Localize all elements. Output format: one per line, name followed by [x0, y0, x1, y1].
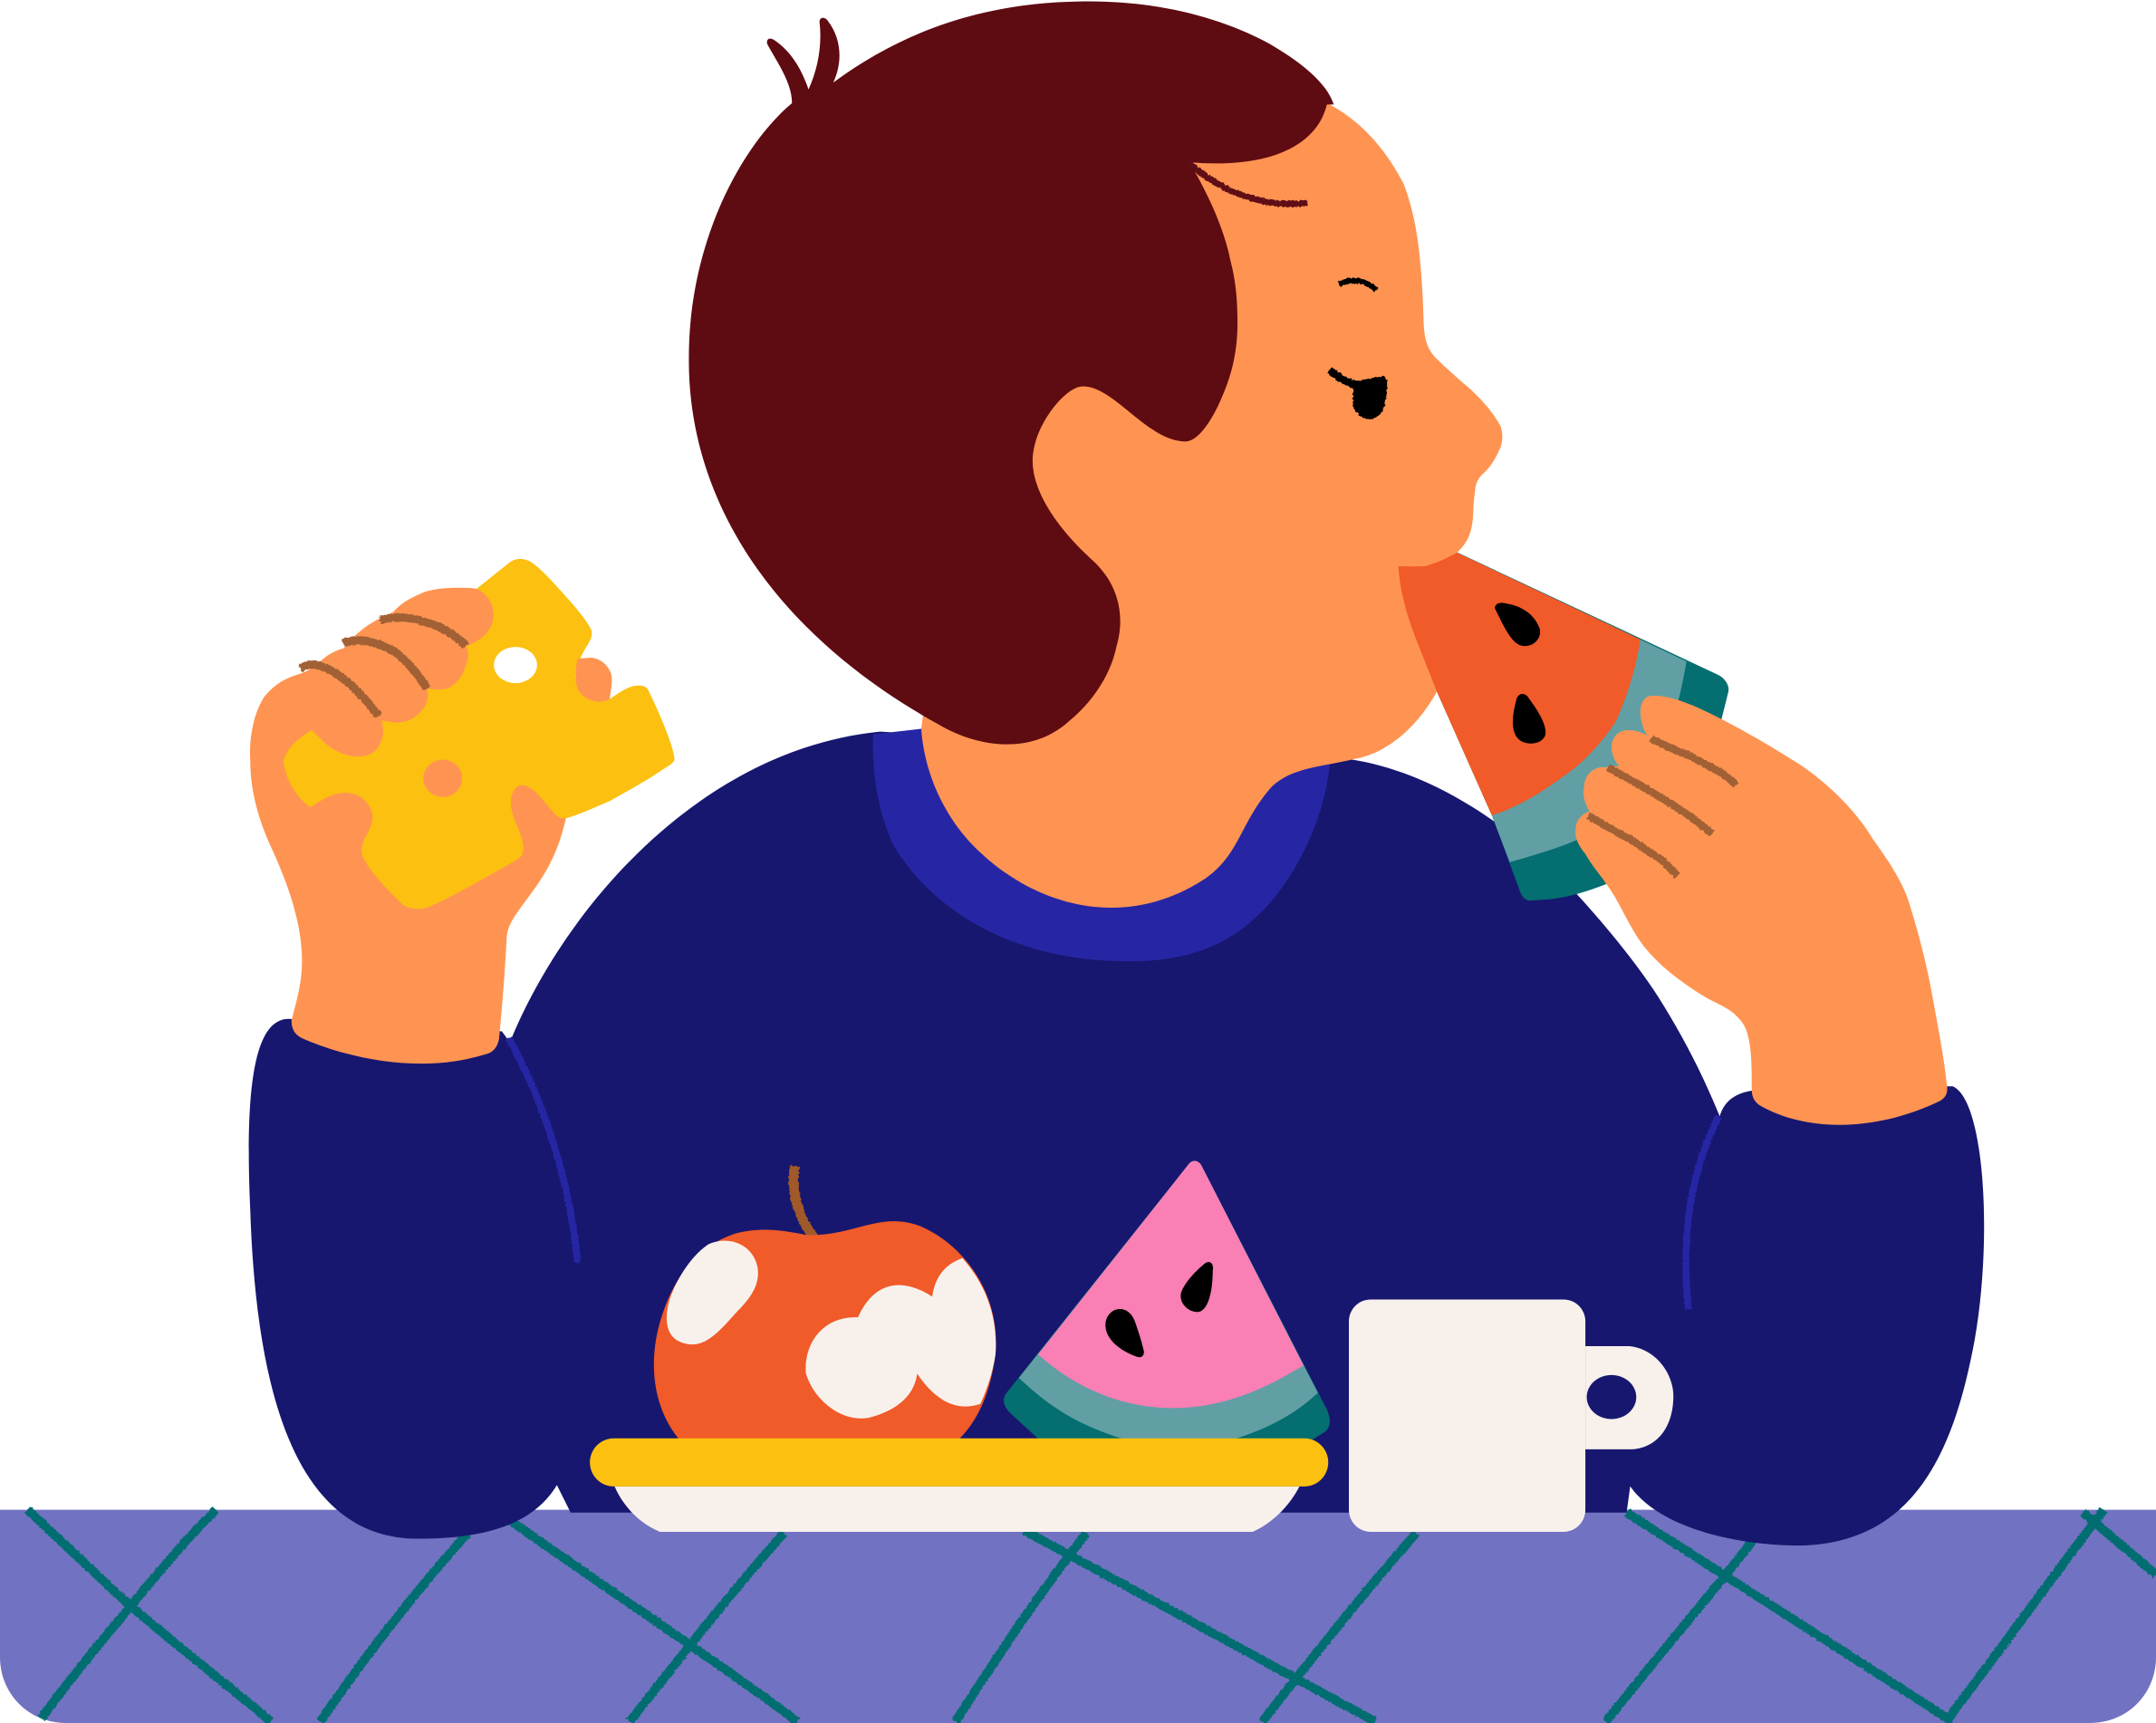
left sleeve	[249, 1019, 584, 1539]
torso sweater	[509, 732, 1787, 1513]
pink watermelon wedge	[1004, 1161, 1330, 1441]
nose mark	[1339, 281, 1376, 290]
fingers	[261, 588, 494, 770]
sleeve seams	[509, 1038, 1718, 1309]
cheese wedge	[284, 559, 675, 909]
sweater collar	[873, 729, 1330, 961]
face and neck	[921, 103, 1502, 908]
knuckle lines	[300, 618, 467, 716]
mug	[1349, 1299, 1673, 1532]
closed eye	[1330, 370, 1388, 419]
hair	[688, 1, 1333, 745]
watermelon slice held to mouth	[1381, 517, 1728, 900]
plate	[590, 1439, 1328, 1532]
left hand holding cheese	[250, 559, 675, 1064]
right sleeve	[1630, 1086, 1984, 1545]
apple	[654, 1166, 996, 1441]
eyebrow	[1189, 163, 1307, 204]
table with checked cloth	[0, 1510, 2156, 1723]
right hand holding watermelon	[1575, 696, 1948, 1125]
